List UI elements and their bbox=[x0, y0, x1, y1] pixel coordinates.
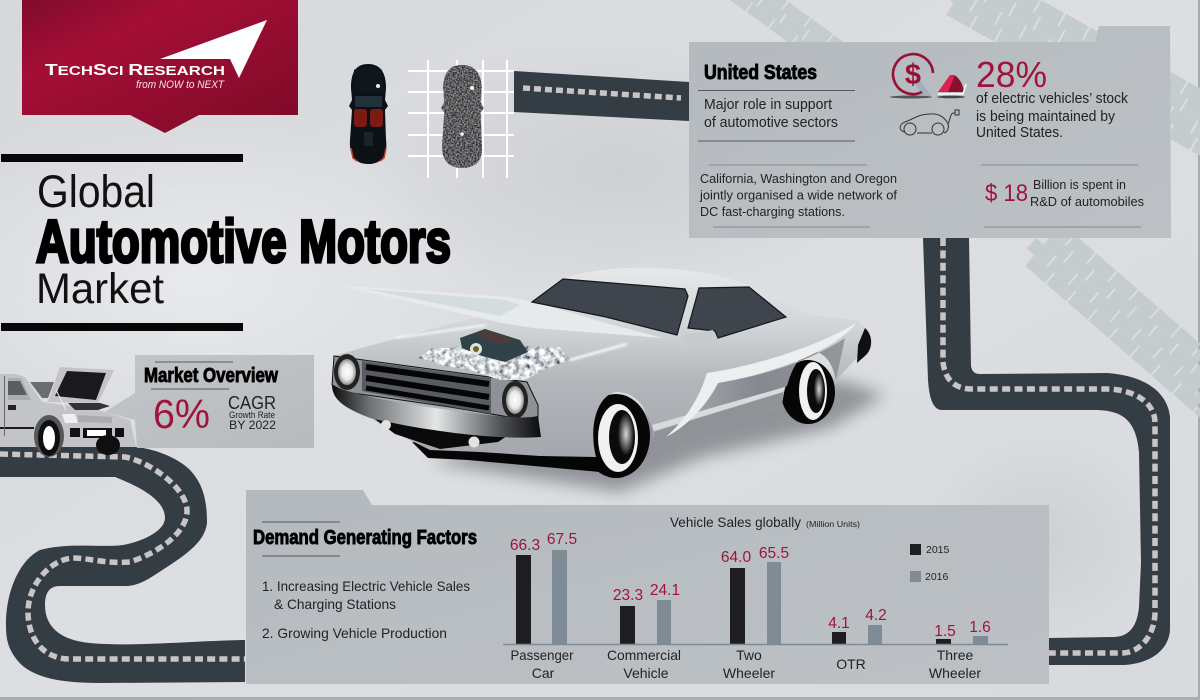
panel: United States: DC fast-charging stations. bbox=[700, 204, 845, 219]
bar chart: vehicle sales: 66.3 bbox=[510, 537, 540, 554]
car: headlights bbox=[334, 354, 360, 390]
icon: parking grid bbox=[408, 60, 514, 178]
logo panel bbox=[22, 0, 298, 133]
car: bumper bbox=[332, 385, 541, 438]
list: factors: 1. Increasing Electric Vehicle Sales bbox=[262, 578, 470, 594]
bar chart: vehicle sales: Three bbox=[937, 647, 973, 663]
car: mirror bbox=[681, 330, 718, 351]
panel: Market Overview bbox=[105, 355, 314, 448]
icon: small car with open hood bbox=[0, 367, 136, 457]
stat: 28%: 28% bbox=[976, 54, 1047, 95]
text: CAGR: CAGR bbox=[228, 393, 276, 413]
panel: United States bbox=[689, 26, 1171, 238]
logo tagline: from NOW to NEXT bbox=[136, 79, 225, 91]
bar chart: vehicle sales: 67.5 bbox=[547, 531, 577, 548]
text: California: California, Washington and Oregon bbox=[700, 171, 897, 186]
title line: Automotive Motors: Automotive Motors bbox=[36, 208, 451, 275]
panel: Market Overview: BY 2022 bbox=[229, 420, 276, 432]
title line: Global: Global bbox=[37, 166, 155, 217]
bar chart: vehicle sales: 1.5 bbox=[934, 623, 956, 640]
panel: United States: R&D of automobiles bbox=[1030, 194, 1144, 209]
car: side window bbox=[688, 287, 786, 338]
car: fascia bbox=[332, 356, 538, 422]
icon: electric car bbox=[900, 110, 959, 135]
heading: Demand Generating Factors: Demand Generating Factors bbox=[253, 527, 477, 549]
road: top segment bbox=[514, 71, 689, 121]
road: left segment bbox=[0, 442, 245, 683]
text: R&D spend: Billion is spent in bbox=[1033, 177, 1126, 192]
text: stock share: of electric vehicles’ stock bbox=[976, 91, 1129, 107]
logo name: T ECH S CI R ESEARCH bbox=[45, 62, 225, 79]
bar chart: vehicle sales: Car bbox=[532, 665, 555, 681]
car: body bbox=[334, 268, 868, 457]
bar chart: vehicle sales: OTR bbox=[836, 656, 866, 672]
panel: United States: jointly organised a wide network of bbox=[699, 188, 897, 202]
car: hood highlights bbox=[395, 325, 486, 338]
icon: dollar ring: $ bbox=[905, 59, 921, 91]
heading: United States: United States bbox=[704, 62, 817, 84]
icon: grey car top view bbox=[441, 65, 484, 168]
legend: 2016 bbox=[925, 571, 949, 583]
icon: black car top view bbox=[349, 64, 388, 164]
car: grille bbox=[362, 361, 491, 414]
stat: $18: $ 18 bbox=[985, 180, 1028, 207]
car: wheel wells bbox=[582, 394, 650, 478]
car: chin bbox=[368, 414, 510, 449]
title line: Market: Market bbox=[36, 265, 164, 313]
logo arrow bbox=[160, 20, 267, 78]
bar chart: vehicle sales: Two bbox=[736, 647, 762, 663]
bar chart: vehicle sales: 23.3 bbox=[613, 587, 643, 604]
car: windshield bbox=[532, 279, 688, 335]
stat: 6%: 6% bbox=[153, 391, 210, 437]
legend: 2015 bbox=[926, 544, 950, 556]
bar chart: vehicle sales: Passenger bbox=[510, 647, 574, 663]
icon: charging cart bbox=[937, 75, 966, 98]
text: major role: Major role in support bbox=[704, 97, 832, 113]
panel: United States: of automotive sectors bbox=[704, 115, 838, 131]
bar chart: vehicle sales: Wheeler bbox=[929, 665, 981, 681]
bar chart: vehicle sales: 65.5 bbox=[759, 545, 789, 562]
panel: Demand Generating Factors: 2. Growing Vehicle Production bbox=[262, 625, 447, 641]
bar chart: vehicle sales: 24.1 bbox=[650, 582, 680, 599]
illustration: silver muscle car bbox=[332, 268, 885, 492]
bar chart: vehicle sales: (Million Units) bbox=[806, 519, 860, 529]
bar chart: vehicle sales: 4.1 bbox=[828, 615, 850, 632]
bar chart: vehicle sales: 64.0 bbox=[721, 549, 751, 566]
bar chart: vehicle sales: 4.2 bbox=[865, 607, 887, 624]
car: white stripe bbox=[666, 323, 856, 437]
car: front wheel bbox=[598, 404, 638, 472]
tyre tracks bbox=[727, 0, 1200, 426]
panel: United States: is being maintained by bbox=[976, 109, 1116, 125]
car: side panel bbox=[672, 338, 845, 422]
road: right segment bbox=[923, 238, 1170, 665]
bar chart: vehicle sales: Wheeler bbox=[723, 665, 775, 681]
legend bbox=[910, 544, 950, 583]
car: raised hood bbox=[337, 285, 663, 338]
panel: Demand Generating Factors bbox=[246, 490, 1049, 684]
car: rear wheel bbox=[799, 362, 827, 420]
car: engine bbox=[418, 329, 570, 380]
heading: Market Overview: Market Overview bbox=[144, 365, 278, 387]
icon: dollar ring bbox=[890, 54, 933, 98]
chart title: Vehicle Sales globally bbox=[670, 514, 801, 530]
panel: United States: United States. bbox=[976, 125, 1063, 141]
bar chart: vehicle sales bbox=[503, 514, 1008, 681]
title block bbox=[1, 154, 451, 331]
bar chart: vehicle sales: 1.6 bbox=[969, 619, 991, 636]
bar chart: vehicle sales: Vehicle bbox=[623, 665, 669, 681]
bar chart: vehicle sales: Commercial bbox=[607, 647, 681, 663]
panel: Demand Generating Factors: & Charging Stations bbox=[274, 596, 396, 612]
panel: Market Overview: Growth Rate bbox=[229, 410, 275, 421]
